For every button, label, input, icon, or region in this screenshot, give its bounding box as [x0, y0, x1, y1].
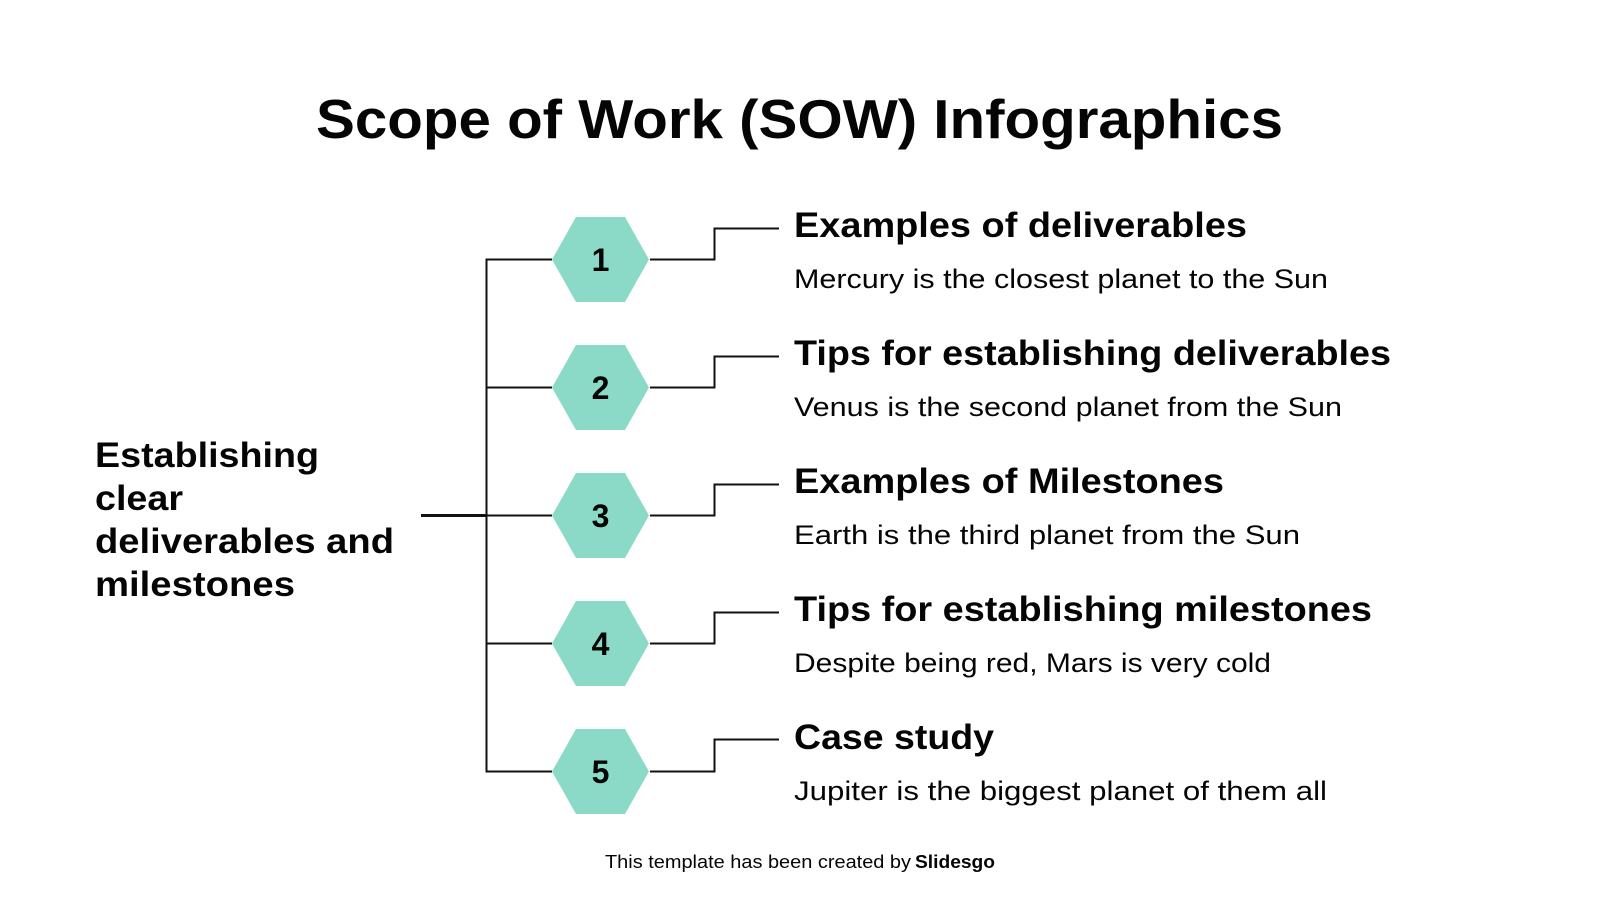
- item 1: [552, 206, 1328, 302]
- heading 1: Examples of deliverables: [794, 206, 1247, 245]
- left label: milestones: [95, 565, 295, 604]
- description 4: Despite being red, Mars is very cold: [794, 648, 1271, 678]
- hexagon 2: [552, 345, 649, 430]
- footer credit: Slidesgo: [915, 852, 995, 872]
- number 5: 5: [592, 754, 609, 790]
- item 2: [552, 334, 1391, 430]
- connector 5: [650, 740, 779, 772]
- hexagon 1: [552, 217, 649, 302]
- tree trunk connector: [421, 260, 552, 772]
- item 4: [552, 590, 1372, 686]
- connector 1: [650, 228, 779, 260]
- heading 3: Examples of Milestones: [794, 462, 1224, 501]
- description 2: Venus is the second planet from the Sun: [794, 392, 1342, 422]
- description 3: Earth is the third planet from the Sun: [794, 520, 1300, 550]
- hexagon 3: [552, 473, 649, 558]
- heading 5: Case study: [794, 718, 995, 757]
- heading 2: Tips for establishing deliverables: [794, 334, 1391, 373]
- item 3: [552, 462, 1300, 558]
- left label: clear: [95, 479, 183, 518]
- hexagon 4: [552, 601, 649, 686]
- description 1: Mercury is the closest planet to the Sun: [794, 264, 1328, 294]
- connector 3: [650, 484, 779, 516]
- footer credit: This template has been created by: [605, 852, 911, 872]
- connector 2: [650, 356, 779, 388]
- number 2: 2: [592, 370, 609, 406]
- heading 4: Tips for establishing milestones: [794, 590, 1372, 629]
- number 1: 1: [592, 242, 609, 278]
- description 5: Jupiter is the biggest planet of them all: [794, 776, 1327, 806]
- title: Scope of Work (SOW) Infographics: [316, 88, 1283, 150]
- number 3: 3: [592, 498, 609, 534]
- left label: Establishing: [95, 436, 319, 475]
- number 4: 4: [592, 626, 610, 662]
- item 5: [552, 718, 1327, 814]
- left label: [95, 436, 394, 604]
- hexagon 5: [552, 729, 649, 814]
- connector 4: [650, 612, 779, 644]
- left label: deliverables and: [95, 522, 394, 561]
